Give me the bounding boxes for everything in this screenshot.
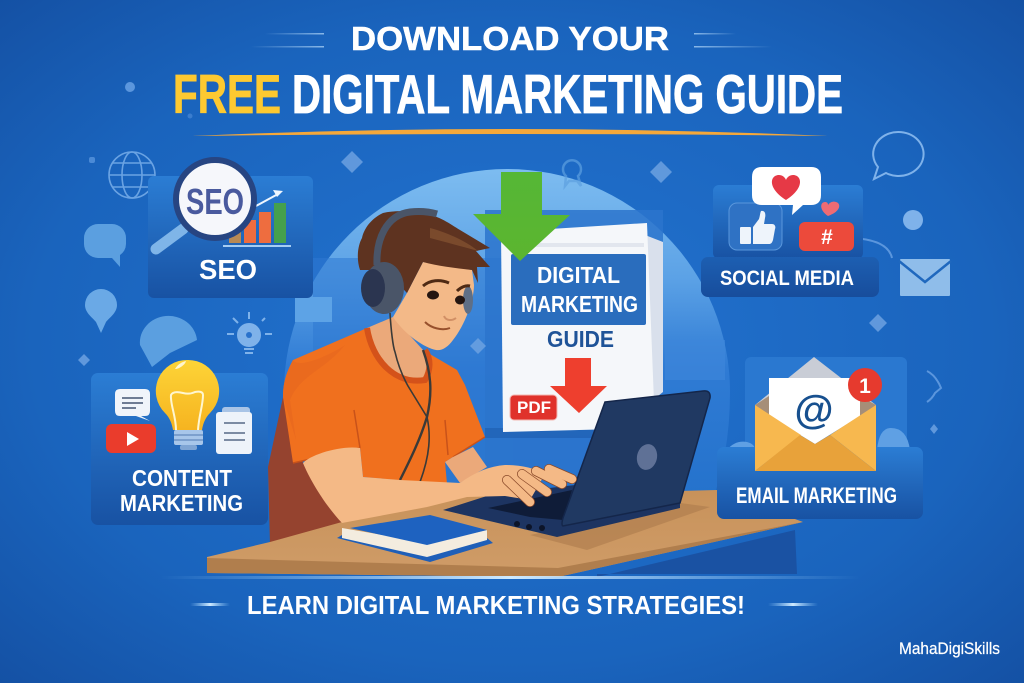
panel label: CONTENT <box>132 465 232 491</box>
far arm <box>445 447 487 483</box>
book <box>337 515 493 562</box>
panel: SEO <box>148 160 313 298</box>
icon: speech bubble left <box>84 224 126 267</box>
icon: lamp dome <box>140 316 197 367</box>
panel: email marketing <box>717 357 923 519</box>
guide banner <box>511 254 646 325</box>
watermark: MahaDigiSkills <box>899 639 1000 658</box>
panel label: SOCIAL MEDIA <box>720 267 854 290</box>
icon: speech bubble right <box>873 132 924 179</box>
desk <box>207 490 803 577</box>
guide document: MARKETING <box>521 291 638 317</box>
icon: thumbs up tile <box>729 203 782 250</box>
panel: content marketing <box>91 360 268 525</box>
icon: hashtag tile <box>799 222 854 251</box>
PDF badge <box>510 395 557 420</box>
panel: social media <box>701 167 879 297</box>
neck <box>367 317 429 379</box>
icon: chat bubble <box>115 389 150 421</box>
green download arrow <box>473 172 570 261</box>
face <box>393 262 474 350</box>
icon: envelope: @ <box>794 388 834 432</box>
laptop <box>443 391 710 537</box>
icon: document <box>216 407 252 454</box>
icon: magnifying glass: SEO <box>186 181 244 222</box>
student arms <box>303 447 572 523</box>
icon: balloon pin <box>85 289 117 333</box>
bar chart <box>223 190 291 246</box>
icon: heart bubble <box>752 167 821 215</box>
panel label: SEO <box>199 254 257 285</box>
guide document <box>485 223 663 438</box>
heading line 2 rest: DIGITAL MARKETING GUIDE <box>292 63 843 125</box>
torso back shading <box>268 397 350 545</box>
central circle backdrop <box>284 169 730 530</box>
icon: small lightbulb <box>227 312 272 353</box>
fingers <box>507 469 572 502</box>
icon: envelope <box>755 357 882 471</box>
guide label: GUIDE <box>547 326 614 352</box>
headphones <box>361 212 473 482</box>
icon: light bulb <box>156 360 219 450</box>
icon: small hearts <box>821 202 839 216</box>
near arm and hand <box>303 447 545 523</box>
panel label: EMAIL MARKETING <box>736 483 897 508</box>
tagline: LEARN DIGITAL MARKETING STRATEGIES! <box>247 590 745 620</box>
heading line 1: DOWNLOAD YOUR <box>351 20 669 57</box>
icon: video play <box>106 424 156 453</box>
orange t-shirt <box>283 328 485 484</box>
title underline <box>192 129 828 136</box>
guide document: DIGITAL <box>537 262 620 288</box>
icon: magnifying glass <box>156 160 254 249</box>
hair <box>358 211 490 293</box>
laptop base <box>443 485 680 537</box>
student <box>268 211 490 545</box>
icon: hashtag tile: # <box>821 226 833 249</box>
face details <box>423 281 470 329</box>
heading side lines <box>251 33 772 48</box>
icon: mail <box>899 259 951 296</box>
heading line 2 free: FREE <box>173 63 281 125</box>
title <box>173 20 843 125</box>
icon: globe <box>109 152 155 198</box>
red arrow <box>550 358 607 413</box>
laptop screen <box>562 391 710 526</box>
PDF badge: PDF <box>517 398 551 417</box>
panel: content marketing: MARKETING <box>120 490 243 516</box>
bottom banner <box>160 576 860 620</box>
icon: envelope: 1 <box>859 375 871 398</box>
decorative background icons <box>78 82 951 434</box>
